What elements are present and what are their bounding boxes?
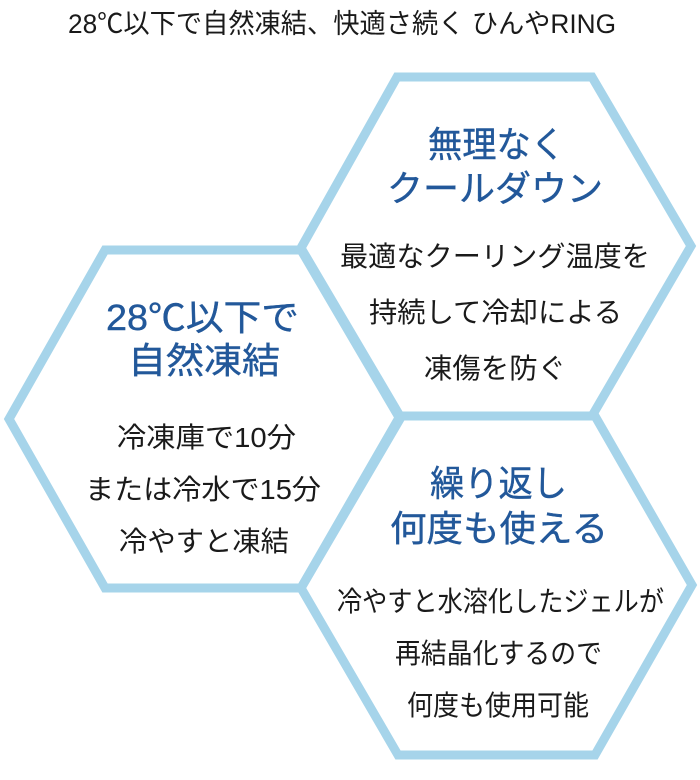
title: 28℃以下で自然凍結、快適さ続く ひんやRING	[68, 9, 616, 39]
heading: reusable: 繰り返し	[430, 463, 567, 504]
text block: reusable description	[337, 586, 664, 721]
heading: reusable	[390, 463, 608, 549]
text block: cool down description	[340, 241, 650, 384]
panel: reusable hexagon	[301, 416, 692, 755]
heading: natural freezing: 自然凍結	[128, 340, 280, 381]
hexagon outline: natural freezing	[9, 250, 400, 588]
text block: cool down description: 持続して冷却による	[369, 297, 622, 328]
panel: cool down hexagon	[301, 77, 691, 416]
text block: natural freezing description: 冷凍庫で10分	[117, 422, 296, 453]
heading: cool down: クールダウン	[387, 168, 603, 209]
text block: reusable description: 再結晶化するので	[395, 638, 602, 669]
text block: cool down description: 最適なクーリング温度を	[340, 241, 650, 272]
heading: cool down: 無理なく	[428, 124, 565, 165]
heading: natural freezing	[106, 297, 299, 381]
text block: reusable description: 冷やすと水溶化したジェルが	[337, 586, 664, 617]
text block: natural freezing description: 冷やすと凍結	[119, 526, 289, 557]
heading: cool down	[387, 124, 603, 209]
text block: natural freezing description: または冷水で15分	[85, 474, 321, 505]
heading: natural freezing: 28℃以下で	[106, 297, 299, 338]
panel: natural freezing hexagon	[9, 250, 400, 588]
hexagon outline: reusable	[301, 416, 692, 755]
hexagon outline: cool down	[301, 77, 691, 416]
text block: reusable description: 何度も使用可能	[407, 690, 589, 721]
heading: reusable: 何度も使える	[390, 508, 608, 549]
text block: natural freezing description	[85, 422, 321, 557]
text block: cool down description: 凍傷を防ぐ	[424, 353, 566, 384]
